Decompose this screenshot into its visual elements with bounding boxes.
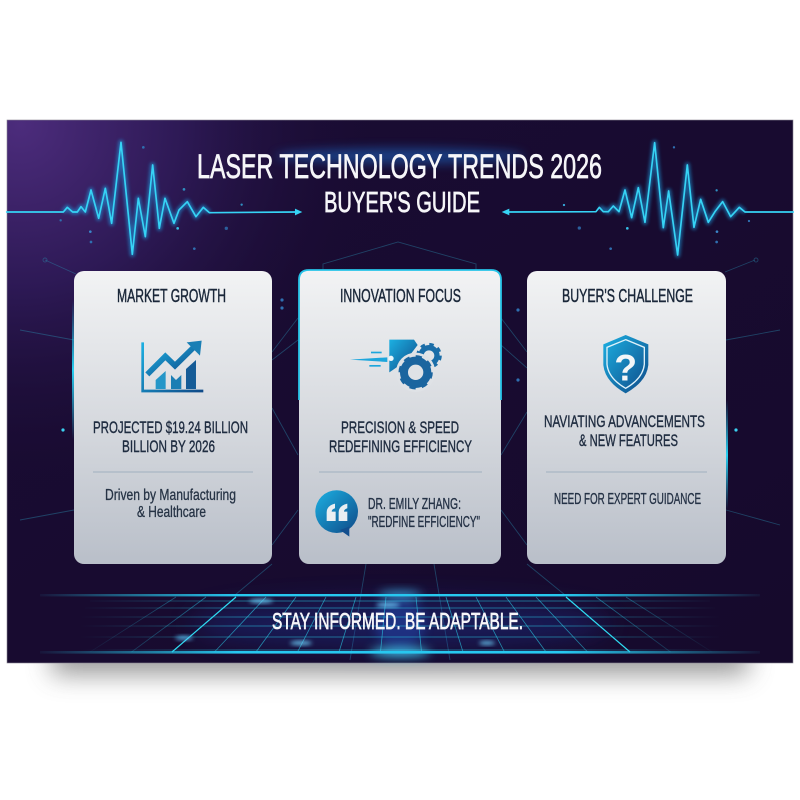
text: expert guidance: NEED FOR EXPERT GUIDANCE — [554, 491, 701, 508]
title line 1: LASER TECHNOLOGY TRENDS 2026 — [197, 148, 602, 186]
text: market drivers: Driven by Manufacturing — [105, 487, 236, 504]
icon: question shield: ? — [614, 346, 637, 388]
text: precision and speed: REDEFINING EFFICIENCY — [329, 437, 472, 456]
panel: market growth — [72, 271, 272, 564]
text: market drivers: & Healthcare — [137, 504, 206, 521]
text: projected value: PROJECTED $19.24 BILLION — [93, 418, 248, 437]
icon: quote bubble — [315, 490, 358, 537]
text: navigating advancements: NAVIATING ADVANCEMENTS — [544, 412, 705, 431]
panel: background — [7, 120, 793, 663]
text: projected value — [93, 418, 248, 456]
text: market drivers — [105, 487, 236, 521]
panel: buyer's challenge — [527, 271, 728, 564]
title — [197, 148, 602, 219]
heading: market growth: MARKET GROWTH — [117, 286, 226, 306]
text: navigating advancements: & NEW FEATURES — [579, 431, 678, 450]
footer tagline: STAY INFORMED. BE ADAPTABLE. — [272, 608, 523, 634]
heading: innovation focus: INNOVATION FOCUS — [340, 286, 461, 306]
text: expert quote: "REDFINE EFFICIENCY" — [368, 514, 480, 531]
chart: right pulse waveform — [502, 143, 793, 255]
icon: laser and gears — [350, 340, 440, 392]
text: navigating advancements — [544, 412, 705, 450]
drop shadow under panel — [52, 640, 748, 674]
text: expert quote — [368, 496, 480, 531]
icon: question shield — [603, 335, 648, 393]
chart: glowing perspective grid — [40, 591, 760, 657]
title line 2: BUYER'S GUIDE — [324, 187, 480, 219]
icon: rising bar chart — [143, 341, 203, 391]
panel: innovation focus — [299, 270, 501, 564]
text: precision and speed — [329, 418, 472, 456]
text: expert quote: DR. EMILY ZHANG: — [368, 496, 461, 513]
text: projected value: BILLION BY 2026 — [122, 437, 215, 456]
heading: buyer's challenge: BUYER'S CHALLENGE — [562, 286, 693, 306]
chart: left pulse waveform — [7, 142, 302, 254]
text: precision and speed: PRECISION & SPEED — [341, 418, 459, 437]
